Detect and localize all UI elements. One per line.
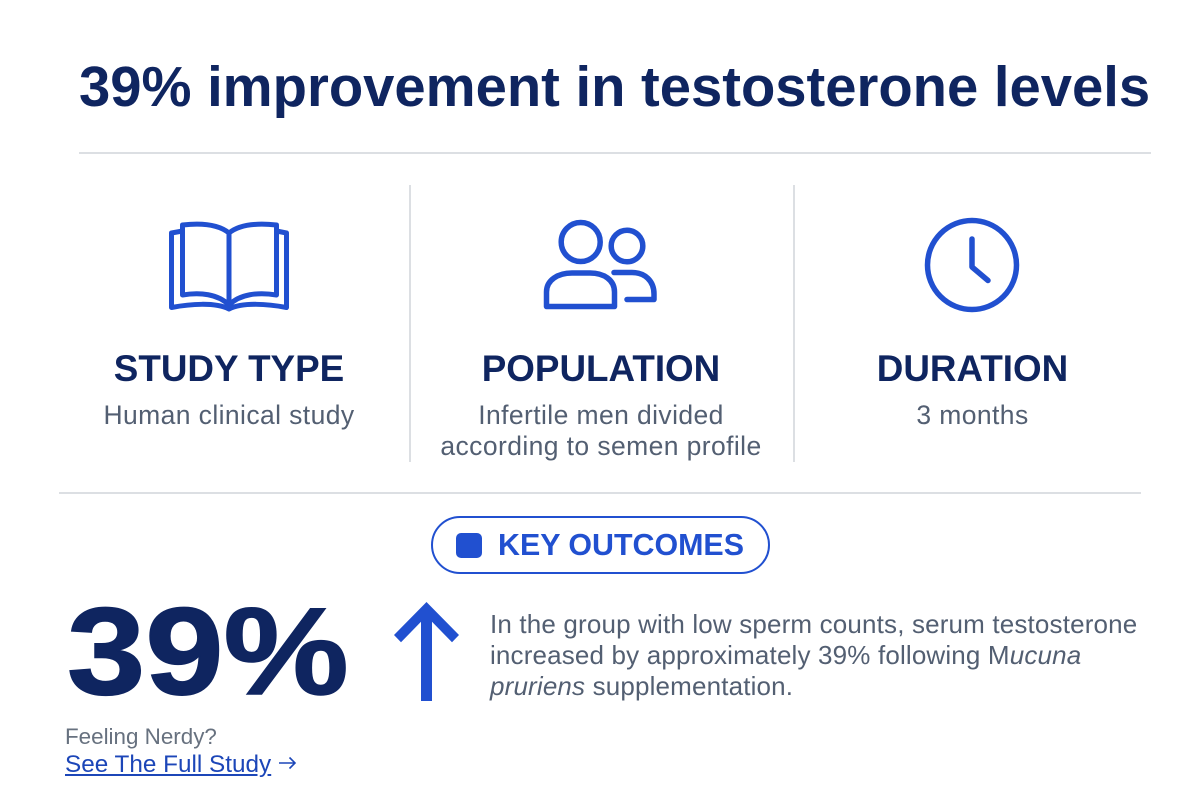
icon: clock (924, 218, 1020, 312)
feeling nerdy prompt: Feeling Nerdy? (65, 724, 217, 749)
key outcomes badge (431, 516, 770, 574)
big statistic: 39% (67, 583, 349, 721)
badge label: KEY OUTCOMES (498, 528, 744, 562)
heading: study type: STUDY TYPE (114, 348, 344, 389)
text: population: according to semen profile (440, 431, 762, 461)
text: duration: 3 months (916, 400, 1029, 430)
text: population (440, 400, 762, 461)
study link: See The Full Study (65, 751, 271, 778)
outcome description (489, 609, 1137, 701)
icon: square bullet (456, 533, 482, 558)
icon: people (544, 220, 657, 310)
text: study type: Human clinical study (103, 400, 355, 430)
outcome description: In the group with low sperm counts, serum testosterone (490, 609, 1137, 639)
panel: duration (877, 218, 1068, 430)
panel: study type (103, 222, 355, 430)
heading: duration: DURATION (877, 348, 1068, 389)
panel: population (440, 220, 762, 461)
icon: up arrow (394, 602, 459, 701)
icon: open book (169, 222, 289, 312)
title: 39% improvement in testosterone levels (79, 55, 1150, 118)
outcome description: increased by approximately 39% following Mucuna (490, 640, 1081, 670)
text: population: Infertile men divided (478, 400, 724, 430)
outcome description: pruriens supplementation. (490, 671, 793, 701)
heading: population: POPULATION (482, 348, 720, 389)
icon: link arrow (279, 756, 296, 770)
